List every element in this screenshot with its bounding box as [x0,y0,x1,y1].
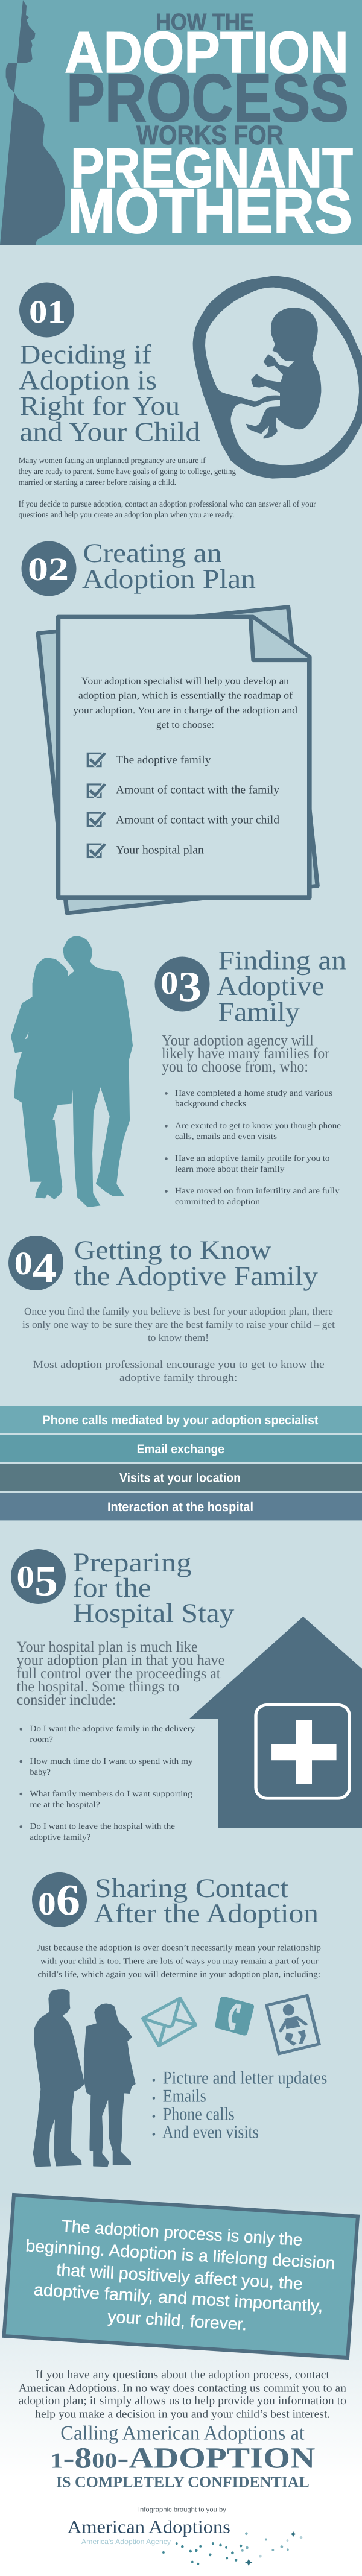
text block: contact information: help you make a decision in you and your child’s best interest. [35,2408,330,2420]
step number 03: 0 [160,965,177,1001]
text block: after the adoption: child’s life, which again you will determine in your adoption plan, including: [37,1971,320,1980]
text block: getting to know: Once you find the family you believe is best for your adoption plan, there [24,1305,333,1317]
bar: visits [0,1464,362,1491]
text block: after the adoption: Just because the adoption is over doesn’t necessarily mean your relationship [37,1944,321,1953]
step number 05 [11,1549,66,1605]
text block: contact information: American Adoptions. In no way does contacting us commit you to an [19,2382,346,2394]
text block: contact information [19,2369,346,2420]
title: WORKS FOR [136,121,284,150]
heading: deciding if adoption is right: Right for You [19,391,180,421]
heading: creating an adoption plan: Creating an [83,538,222,568]
panel: step 01 deciding [19,276,362,520]
bullet list: family qualities: Have moved on from infertility and are fully [175,1187,340,1196]
text block: intro: they are ready to parent. Some have goals of going to college, getting [19,467,236,476]
checklist item: your hospital plan [87,844,205,857]
text block: plan intro [73,675,298,730]
logo: american adoptions [68,2506,302,2566]
text block: after the adoption [37,1944,321,1980]
bullet list: family qualities: Have an adoptive family profile for you to [175,1154,329,1163]
icon: document sheets [38,607,317,913]
heading: getting to know the family: Getting to Know [74,1235,272,1265]
step number 04: 0 [14,1245,31,1281]
step number 04: 4 [33,1245,57,1292]
heading: finding an adoptive family: Family [218,997,300,1027]
checklist item: the adoptive family: The adoptive family [116,754,211,766]
heading: preparing for the hospital stay [72,1547,235,1628]
icon: star trail [162,2531,302,2566]
panel: step 04 getting to know [0,1235,362,1520]
bullet list: family qualities: calls, emails and even visits [175,1132,277,1141]
bar: email exchange: Email exchange [137,1442,224,1456]
step number 05: 5 [34,1558,58,1605]
text block: hospital plan [17,1639,224,1708]
text block: plan intro: get to choose: [156,719,214,730]
text block: intro: questions and help you create an adoption plan when you are ready. [19,511,234,520]
panel: step 06 sharing contact [32,1872,327,2167]
call to action: phone number [50,2423,315,2490]
step number 06 [32,1872,87,1927]
logo: american adoptions: America's Adoption Agency [81,2537,171,2546]
heading: getting to know the family [74,1235,319,1291]
icon: hospital building [189,1617,362,1828]
text block: hospital plan: consider include: [17,1692,116,1708]
callout: lifelong decision: your child, forever. [107,2307,247,2334]
text block: hospital plan: the hospital. Some things to [17,1679,179,1695]
text block: getting to know: to know them! [148,1332,209,1343]
text block: agency families [162,1032,330,1075]
bullet list: hospital questions: What family members do I want supporting [30,1790,192,1799]
checklist item: your hospital plan: Your hospital plan [116,844,205,857]
bullet list: hospital questions: room? [30,1735,53,1744]
heading: preparing for the hospital stay: for the [72,1573,151,1603]
heading: deciding if adoption is right: Adoption is [19,365,157,396]
icon: couple silhouette [11,936,133,1207]
logo: american adoptions: American Adoptions [68,2518,230,2537]
bar: phone calls [0,1406,362,1433]
text block: agency families: you to choose from, who: [162,1059,308,1075]
call to action: phone number: 1-800-ADOPTION [50,2441,315,2475]
bullet list: hospital questions: adoptive family? [30,1833,91,1842]
bullet list: hospital questions: How much time do I want to spend with my [30,1757,193,1766]
text block: agency families: Your adoption agency will [162,1032,314,1049]
callout: lifelong decision: beginning. Adoption is a lifelong decision [25,2236,336,2273]
text block: plan intro: Your adoption specialist will help you develop an [81,675,289,687]
icon: fetus in womb [193,276,362,479]
text block: hospital plan: full control over the proceedings at [17,1665,221,1682]
icon: pregnant woman silhouette [0,0,65,245]
bullet list: family qualities: committed to adoption [175,1198,260,1207]
bullet list: contact types: And even visits [162,2123,259,2142]
text block: agency families: likely have many families for [162,1046,330,1062]
callout: lifelong decision: that will positively affect you, the [56,2260,303,2293]
text block: getting to know [22,1305,335,1383]
heading: creating an adoption plan [82,538,256,594]
callout: lifelong decision: adoptive family, and most importantly, [33,2280,323,2316]
bullet list: family qualities: background checks [175,1100,246,1109]
text block: plan intro: your adoption. You are in charge of the adoption and [73,704,298,716]
bar: hospital interaction: Interaction at the hospital [107,1500,253,1514]
step number 06: 06 [38,1875,80,1924]
bar: email exchange [0,1435,362,1462]
bullet list: contact types [153,2068,327,2142]
bullet list: hospital questions: me at the hospital? [30,1801,100,1810]
bullet list: contact types: Phone calls [163,2104,235,2124]
bullet list: family qualities: Are excited to get to know you though phone [175,1122,341,1131]
heading: deciding if adoption is right [19,339,200,447]
heading: sharing contact [94,1873,319,1928]
heading: deciding if adoption is right: and Your Child [19,417,200,447]
text block: contact information: If you have any questions about the adoption process, contact [36,2369,330,2381]
text block: intro: married or starting a career before raising a child. [19,478,176,487]
text block: intro [19,456,316,520]
callout: lifelong decision: The adoption process is only the [61,2217,303,2249]
step number 01: 01 [29,294,66,330]
heading: finding an adoptive family: Adoptive [217,971,325,1001]
bullet list: family qualities: Have completed a home study and various [175,1089,332,1098]
text block: after the adoption: with your child is too. There are lots of ways you may remain a part of your [40,1957,319,1966]
call to action: phone number: Calling American Adoptions at [60,2423,305,2445]
panel: step 05 hospital stay [11,1547,362,1842]
step number 03 [154,956,210,1012]
step number 04 [8,1236,63,1292]
text block: hospital plan: Your hospital plan is much like [17,1639,198,1655]
text block: intro: Many women facing an unplanned pregnancy are unsure if [19,456,206,466]
icon: couple standing silhouette [33,1990,135,2167]
title: HOW THE [156,10,254,35]
heading: sharing contact: After the Adoption [94,1898,319,1928]
step number 01 [19,282,74,338]
step number 02 [22,541,76,596]
heading: getting to know the family: the Adoptive Family [74,1261,319,1291]
checklist item: contact with the family: Amount of contact with the family [116,784,280,797]
callout: lifelong decision [4,2195,359,2360]
text block: getting to know: is only one way to be sure they are the best family to raise your child – get [22,1319,335,1330]
icon: envelope [143,1998,196,2046]
text block: getting to know: Most adoption professional encourage you to get to know the [33,1359,325,1370]
step number 05: 0 [17,1559,33,1595]
bar: phone calls: Phone calls mediated by your adoption specialist [43,1413,318,1427]
heading: preparing for the hospital stay: Hospital Stay [72,1598,235,1628]
icon: telephone [215,1997,254,2036]
call to action: phone number: IS COMPLETELY CONFIDENTIAL [56,2473,310,2490]
bar: hospital interaction [0,1493,362,1520]
text block: getting to know: adoptive family through: [119,1372,237,1383]
header panel [0,0,362,247]
bullet list: hospital questions: Do I want the adoptive family in the delivery [30,1725,195,1734]
bar: visits: Visits at your location [119,1471,241,1485]
text block: plan intro: adoption plan, which is essentially the roadmap of [78,690,293,701]
title [65,10,353,247]
text block: intro: If you decide to pursue adoption, contact an adoption professional who can answer all of your [19,500,316,509]
heading: creating an adoption plan: Adoption Plan [82,564,256,594]
heading: deciding if adoption is right: Deciding if [19,339,151,369]
bullet list: hospital questions: baby? [30,1768,51,1777]
panel: step 03 finding a family [11,936,346,1207]
bullet list: contact types: Emails [163,2086,206,2106]
heading: finding an adoptive family: Finding an [218,945,346,975]
heading: finding an adoptive family [217,945,346,1027]
step number 02: 02 [28,551,69,587]
text block: contact information: adoption plan; it simply allows us to help provide you information to [19,2394,346,2407]
heading: preparing for the hospital stay: Preparing [72,1547,192,1577]
step number 03: 3 [178,964,202,1011]
text block: hospital plan: your adoption plan in that you have [17,1652,224,1668]
bullet list: family qualities [165,1089,341,1207]
icon: baby photo [267,1995,319,2054]
checklist [87,753,280,857]
panel: step 02 adoption plan [22,538,317,913]
bullet list: contact types: Picture and letter updates [163,2068,327,2088]
bullet list: family qualities: learn more about their family [175,1165,285,1174]
bullet list: hospital questions: Do I want to leave the hospital with the [30,1822,175,1831]
heading: sharing contact: Sharing Contact [95,1873,289,1903]
bullet list: hospital questions [19,1725,195,1842]
logo: american adoptions: Infographic brought to you by [138,2506,226,2513]
checklist item: contact with your child: Amount of contact with your child [116,814,280,827]
